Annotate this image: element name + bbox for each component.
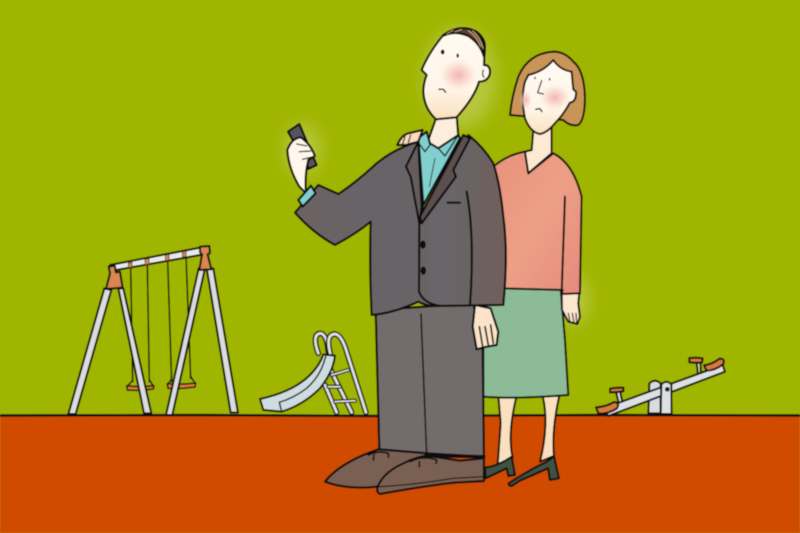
seesaw seats	[596, 402, 618, 414]
man's neck	[428, 115, 458, 157]
slide chute	[260, 354, 335, 412]
seesaw beam	[603, 365, 725, 416]
woman's sweater	[493, 152, 582, 294]
man's hand at side	[473, 305, 498, 349]
woman's shoes	[485, 457, 515, 478]
swing ropes and seats	[127, 255, 196, 390]
man's shirt	[418, 132, 460, 205]
swing set	[68, 246, 238, 415]
ground: orange-red floor	[0, 415, 800, 533]
man's hair	[443, 28, 484, 57]
seesaw front support	[661, 382, 672, 414]
swing top bar	[110, 247, 204, 271]
man's raised hand	[287, 137, 315, 193]
jacket details	[419, 192, 472, 306]
man's far shoe	[325, 449, 427, 488]
seesaw handles	[610, 358, 703, 406]
shirt cuff	[298, 186, 316, 207]
seesaw rear support	[648, 381, 661, 413]
woman's legs	[498, 396, 517, 465]
woman's hand on shoulder	[397, 130, 423, 145]
man's head	[422, 28, 490, 119]
woman's face	[520, 60, 576, 134]
swing frame legs	[68, 268, 238, 415]
slide	[260, 333, 366, 412]
woman's hair	[510, 52, 585, 125]
woman	[483, 288, 580, 486]
background: green sky	[0, 0, 800, 416]
swing corner brackets	[106, 246, 211, 289]
slide ladder	[315, 333, 366, 412]
man	[325, 303, 498, 494]
skirt	[483, 288, 568, 398]
man's jacket	[295, 135, 506, 315]
jacket lapels	[406, 142, 422, 223]
woman's left hand	[562, 293, 580, 324]
phone	[288, 124, 317, 169]
trousers	[376, 303, 484, 457]
woman's neck	[525, 125, 552, 173]
seesaw	[596, 358, 725, 416]
white glow behind couple	[285, 28, 589, 326]
man's near shoe	[377, 456, 484, 494]
